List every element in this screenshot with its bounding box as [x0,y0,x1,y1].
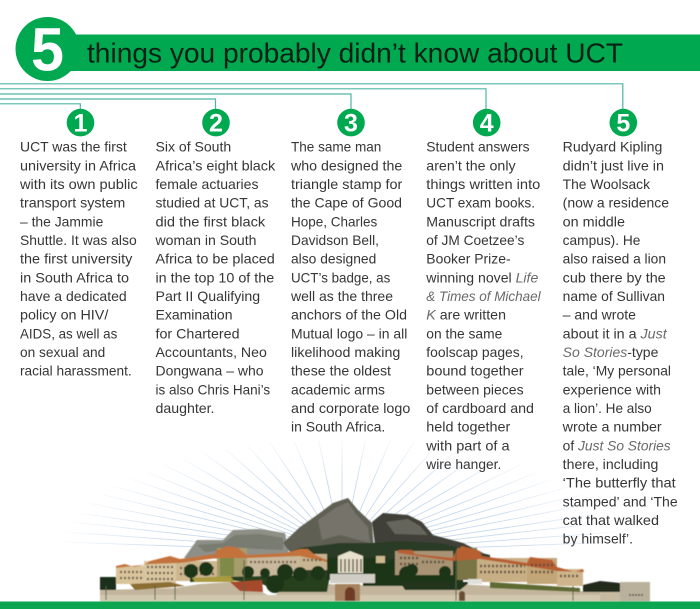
text block: fact 4: of JM Coetzee’s [426,233,524,248]
text block: fact 4: bound together [426,364,524,379]
number badge 1: 1 [74,109,88,137]
text block: fact 5 [562,140,678,547]
hedge and red bank [130,575,330,592]
badge: big number 5 [16,16,80,84]
text block: fact 2: is also Chris Hani’s [156,382,270,397]
text block: fact 2: Africa’s eight black [156,158,275,173]
text block: fact 1: in South Africa to [20,270,129,285]
text block: fact 2 [154,140,275,416]
text block: fact 5: Rudyard Kipling [563,140,662,155]
text block: fact 1: on sexual and [20,345,105,360]
left buildings [116,546,327,585]
text block: fact 4: & Times of Michael [426,289,542,304]
text block: fact 4: Booker Prize- [426,252,511,267]
text block: fact 4: aren’t the only [426,158,516,173]
number badge 2: 2 [209,109,223,137]
text block: fact 5: So Stories-type [563,345,658,360]
text block: fact 1: with its own public [19,177,138,192]
text block: fact 5: stamped’ and ‘The [563,494,678,509]
text block: fact 2: Africa to be placed [156,252,275,267]
text block: fact 3: Hope, Charles [291,214,377,229]
text block: fact 5: name of Sullivan [563,289,665,304]
text block: fact 4: UCT exam books. [426,196,535,211]
text block: fact 3: also designed [291,252,376,267]
Jameson Hall [330,551,385,583]
text block: fact 3: in South Africa. [291,420,385,435]
number badge 3 [337,109,365,137]
connector lines [0,84,623,110]
lower retaining wall [100,582,600,602]
table mountain [184,529,290,560]
text block: fact 5: experience with [563,382,661,397]
text block: fact 1: AIDS, as well as [20,326,117,341]
sun rays [63,437,621,552]
text block: fact 5: The Woolsack [563,177,650,192]
text block: fact 4: with part of a [425,438,510,453]
text block: fact 3: Davidson Bell, [291,233,379,248]
lamp posts [106,550,573,601]
text block: fact 4: wire hanger. [425,457,501,472]
bottom green bar [0,602,700,609]
text block: fact 1: racial harassment. [20,364,132,379]
number badge 2 [202,109,230,137]
text block: fact 4: Student answers [426,140,530,155]
text block: fact 4: things written into [426,177,540,192]
text block: fact 5: campus). He [563,233,640,248]
text block: fact 1: university in Africa [20,158,136,173]
text block: fact 2: Dongwana – who [156,364,264,379]
text block: fact 1: transport system [20,196,125,211]
text block: fact 1: UCT was the first [20,140,127,155]
number badge 4 [473,109,501,137]
text block: fact 3: likelihood making [291,345,400,360]
text block: fact 3: anchors of the Old [291,308,407,323]
left trees [100,573,128,590]
text block: fact 5: tale, ‘My personal [563,364,671,379]
text block: fact 5: on middle [563,214,625,229]
text block: fact 1: have a dedicated [20,289,127,304]
devil's peak [283,498,483,553]
text block: fact 5: (now a residence [563,196,669,211]
number badge 3: 3 [344,109,358,137]
text block: fact 3: triangle stamp for [291,177,403,192]
text block: fact 3: Mutual logo – in all [291,326,407,341]
text block: fact 4: on the same [426,326,502,341]
text block: fact 4: Manuscript drafts [426,214,535,229]
text block: fact 5: about it in a Just [563,326,668,341]
number badge 4: 4 [480,109,494,137]
text block: fact 2: Accountants, Neo [156,345,267,360]
number badge 1 [67,109,94,137]
text block: fact 5: didn’t just live in [563,158,664,173]
number badge 5 [610,109,637,137]
text block: fact 3: the Cape of Good [291,196,402,211]
title: things you probably didn’t know about UCT [87,38,623,68]
text block: fact 2: Part II Qualifying [156,289,260,304]
text block: fact 2: for Chartered [156,326,240,341]
text block: fact 5: by himself’. [563,532,633,547]
text block: fact 4: held together [426,420,511,435]
text block: fact 3: The same man [291,140,381,155]
mountain slopes [280,541,490,578]
right buildings [395,546,584,592]
text block: fact 4: winning novel Life [425,270,539,285]
text block: fact 1: Shuttle. It was also [20,233,137,248]
text block: fact 1: the first university [20,252,133,267]
campus panorama [100,498,650,602]
text block: fact 2: Six of South [156,140,231,155]
badge: big number 5: 5 [31,16,64,84]
text block: fact 2: female actuaries [156,177,259,192]
text block: fact 5: of Just So Stories [563,438,671,453]
text block: fact 4 [425,140,542,472]
text block: fact 3 [290,140,410,435]
text block: fact 4: foolscap pages, [426,345,524,360]
text block: fact 4: between pieces [426,382,524,397]
text block: fact 2: in the top 10 of the [156,270,274,285]
text block: fact 4: of cardboard and [426,401,534,416]
text block: fact 5: there, including [563,457,658,472]
text block: fact 3: academic arms [291,382,385,397]
text block: fact 5: cub there by the [563,270,666,285]
far right trees and building [583,581,650,602]
text block: fact 1: – the Jammie [20,214,103,229]
text block: fact 2: did the first black [156,214,265,229]
text block: fact 5: ‘The butterfly that [563,476,676,491]
text block: fact 5: a lion’. He also [563,401,652,416]
text block: fact 4: K are written [426,308,506,323]
text block: fact 2: woman in South [154,233,256,248]
text block: fact 5: wrote a number [562,420,662,435]
text block: fact 5: – and wrote [563,308,636,323]
text block: fact 5: cat that walked [563,513,659,528]
text block: fact 2: Examination [156,308,232,323]
text block: fact 3: well as the three [290,289,393,304]
text block: fact 2: daughter. [156,401,214,416]
text block: fact 1 [19,140,138,379]
text block: fact 3: these the oldest [291,364,391,379]
text block: fact 3: who designed the [290,158,402,173]
header banner [60,34,700,71]
text block: fact 2: studied at UCT, as [156,196,269,211]
text block: fact 3: UCT’s badge, as [291,270,390,285]
text block: fact 5: also raised a lion [563,252,666,267]
trees in front of campus [184,558,463,593]
number badge 5: 5 [616,109,630,137]
text block: fact 3: and corporate logo [291,401,410,416]
text block: fact 1: policy on HIV/ [20,308,109,323]
